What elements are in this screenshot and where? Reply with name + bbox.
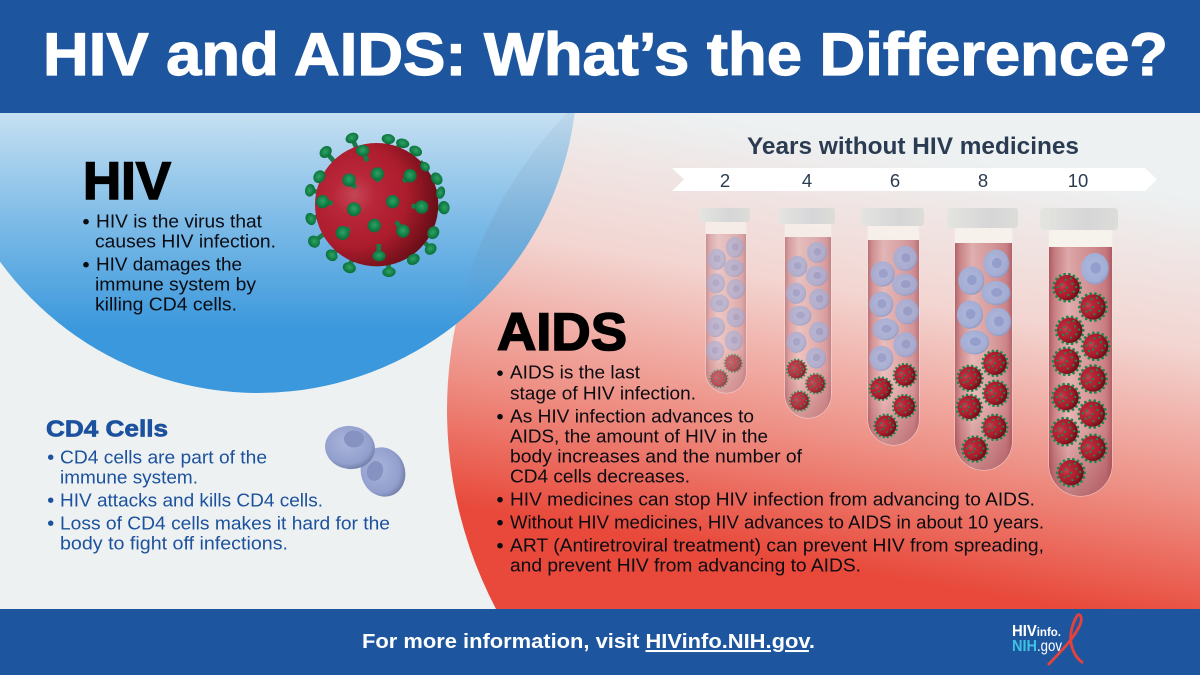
AIDS bullet list: Without HIV medicines, HIV advances to AIDS in about 10 years. bbox=[510, 513, 1044, 533]
timeline numbers: 6 bbox=[890, 170, 900, 191]
panel: AIDS background circle bbox=[447, 113, 1200, 609]
CD4 bullet list bbox=[48, 448, 390, 554]
AIDS heading: AIDS bbox=[497, 303, 627, 362]
front stems and heads bbox=[316, 145, 428, 261]
CD4 bullet list: Loss of CD4 cells makes it hard for the bbox=[60, 514, 390, 534]
AIDS text block bbox=[497, 303, 1044, 576]
footer text: For more information, visit HIVinfo.NIH.gov . bbox=[362, 630, 815, 653]
test tube: year 10 bbox=[1040, 208, 1118, 496]
HIV bullet list: killing CD4 cells. bbox=[95, 295, 237, 315]
test tube: year 2 bbox=[700, 208, 750, 393]
CD4 text block bbox=[46, 416, 390, 554]
logo: HIVinfo.NIH.gov with red ribbon: NIH bbox=[1012, 638, 1037, 655]
AIDS bullet list: HIV medicines can stop HIV infection from advancing to AIDS. bbox=[510, 490, 1035, 510]
timeline numbers: 4 bbox=[802, 170, 812, 191]
footer band bbox=[0, 609, 1200, 675]
spike heads bbox=[304, 131, 450, 278]
AIDS bullet list: and prevent HIV from advancing to AIDS. bbox=[510, 556, 861, 576]
CD4 heading: CD4 Cells bbox=[46, 416, 168, 442]
AIDS bullet list: body increases and the number of bbox=[510, 447, 803, 467]
timeline ribbon bbox=[672, 168, 1157, 191]
timeline numbers: 2 bbox=[720, 170, 730, 191]
rear spikes bbox=[310, 138, 444, 272]
HIV bullet list: causes HIV infection. bbox=[95, 232, 276, 252]
AIDS bullet list: stage of HIV infection. bbox=[510, 384, 696, 404]
HIV bullet list: HIV damages the bbox=[96, 255, 242, 275]
HIV bullet list: HIV is the virus that bbox=[96, 212, 262, 232]
icon: HIV virus bbox=[304, 131, 450, 278]
AIDS bullet list: ART (Antiretroviral treatment) can prevent HIV from spreading, bbox=[510, 536, 1044, 556]
icon: CD4 cells bbox=[322, 423, 412, 503]
HIV bullet list: immune system by bbox=[95, 275, 256, 295]
test tube: year 4 bbox=[779, 208, 835, 418]
CD4 bullet list: HIV attacks and kills CD4 cells. bbox=[60, 491, 323, 511]
logo: HIVinfo.NIH.gov with red ribbon: .gov bbox=[1037, 638, 1062, 655]
CD4 bullet list: CD4 cells are part of the bbox=[60, 448, 267, 468]
CD4 bullet list: body to fight off infections. bbox=[60, 534, 288, 554]
panel: HIV blue circle bbox=[0, 113, 575, 393]
logo: HIVinfo.NIH.gov with red ribbon: HIVinfo. bbox=[1012, 623, 1061, 640]
HIV heading: HIV bbox=[83, 152, 171, 211]
AIDS bullet list bbox=[497, 363, 1044, 576]
AIDS bullet list: As HIV infection advances to bbox=[510, 407, 754, 427]
AIDS bullet list: AIDS is the last bbox=[510, 363, 640, 383]
timeline numbers bbox=[720, 170, 1088, 191]
chart heading: years without HIV medicines: Years without HIV medicines bbox=[747, 133, 1079, 160]
test tube: year 8 bbox=[947, 208, 1018, 470]
overlap of the red and blue circles bbox=[476, 124, 572, 258]
HIV text block bbox=[83, 152, 276, 315]
sphere bbox=[315, 143, 438, 266]
AIDS bullet list: CD4 cells decreases. bbox=[510, 467, 690, 487]
timeline numbers: 8 bbox=[978, 170, 988, 191]
logo: HIVinfo.NIH.gov with red ribbon bbox=[1012, 615, 1083, 665]
timeline numbers: 10 bbox=[1068, 170, 1088, 191]
test tube: year 6 bbox=[861, 208, 924, 445]
CD4 bullet list: immune system. bbox=[60, 468, 198, 488]
icon: awareness ribbon bbox=[1048, 615, 1083, 665]
AIDS bullet list: AIDS, the amount of HIV in the bbox=[510, 427, 768, 447]
title: HIV and AIDS: What’s the Difference? bbox=[43, 21, 1168, 88]
title banner bbox=[0, 0, 1200, 113]
HIV bullet list bbox=[83, 212, 276, 315]
